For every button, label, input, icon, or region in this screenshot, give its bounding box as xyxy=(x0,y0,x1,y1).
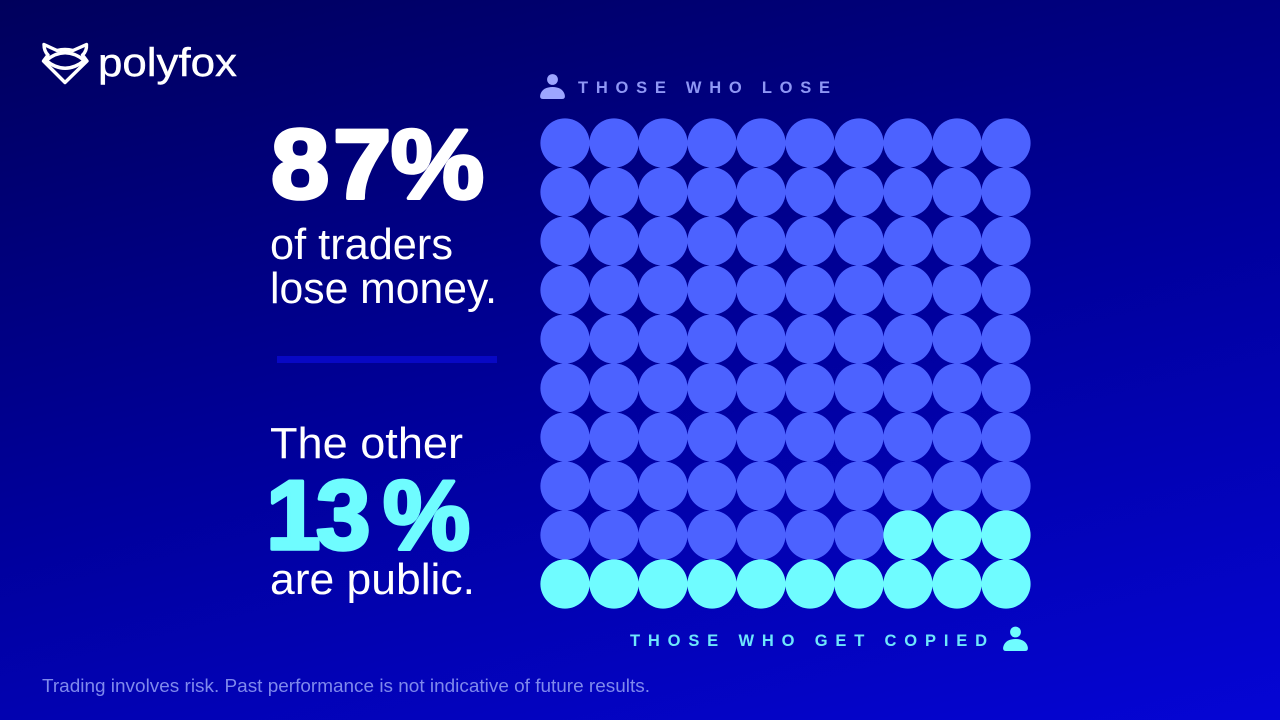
text: The other: The other xyxy=(270,419,463,468)
headline: 87%: 87% xyxy=(271,109,484,219)
text: of traders lose money xyxy=(270,220,497,313)
label: those who lose: THOSE WHO LOSE xyxy=(578,79,830,97)
icon: fox head xyxy=(44,44,87,82)
footer disclaimer: Trading involves risk. Past performance is not indicative of future results. xyxy=(42,675,650,696)
text: of traders lose money: of traders xyxy=(270,220,453,269)
label: those who lose xyxy=(540,74,830,99)
logo: polyfox xyxy=(44,41,237,85)
dots: those who lose xyxy=(540,118,1031,560)
dot grid: 100 traders xyxy=(540,118,1031,609)
icon: person xyxy=(540,74,565,99)
dots: those who get copied xyxy=(540,510,1031,609)
label: those who get copied: THOSE WHO GET COPIED xyxy=(630,632,987,650)
label: those who get copied xyxy=(630,627,1028,651)
wordmark: polyfox xyxy=(98,41,237,85)
headline: 13%: 13% xyxy=(266,460,470,570)
icon: person xyxy=(1003,627,1028,651)
text: are public: are public. xyxy=(270,555,475,604)
text: of traders lose money: lose money. xyxy=(270,264,497,313)
